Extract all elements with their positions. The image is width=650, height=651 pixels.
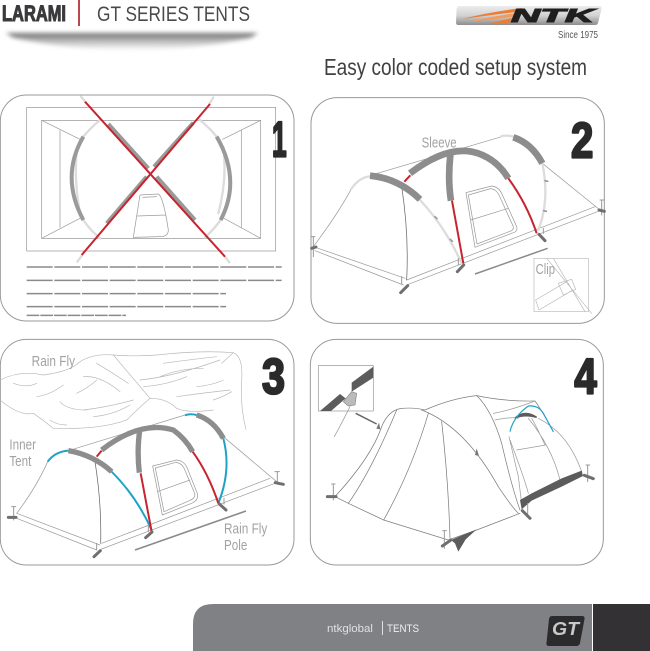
rain fly pole label: Pole xyxy=(224,537,247,554)
panel: step 2 xyxy=(311,98,604,323)
panel: step 3 xyxy=(0,339,294,565)
sleeve label: Sleeve xyxy=(422,135,457,152)
tent outline xyxy=(313,137,600,285)
stakes xyxy=(312,200,604,293)
ground sheet shading xyxy=(451,471,583,552)
pole rod xyxy=(475,248,548,274)
sleeves xyxy=(68,415,223,473)
pointer arrow xyxy=(356,413,377,424)
crossed red poles xyxy=(77,97,229,262)
pole rod xyxy=(135,511,246,550)
blue rain fly poles xyxy=(48,414,227,530)
header shadow xyxy=(6,33,258,50)
stakes xyxy=(327,465,593,548)
clip inset xyxy=(534,258,592,313)
footer divider xyxy=(382,621,383,635)
footer grey panel xyxy=(193,604,592,651)
stakes xyxy=(8,472,283,557)
clip inset: Clip xyxy=(536,261,555,278)
NTK logo xyxy=(456,6,602,41)
sleeves xyxy=(370,137,542,201)
panel frame xyxy=(0,95,294,321)
step number 4: 4 xyxy=(574,349,597,405)
GT logo xyxy=(546,616,585,646)
rain fly pole label: Rain Fly xyxy=(224,520,268,537)
small direction arrows xyxy=(376,423,479,456)
step number 3: 3 xyxy=(262,349,285,405)
sleeves xyxy=(72,123,230,223)
red poles xyxy=(97,451,218,532)
dashed pole lines xyxy=(27,267,282,315)
logo wordmark: NTK xyxy=(511,6,598,26)
inner tent label: Tent xyxy=(9,453,32,470)
fly outline xyxy=(335,396,582,540)
pale poles xyxy=(352,136,545,263)
footer section text: TENTS xyxy=(387,623,419,635)
logo bar xyxy=(456,6,602,25)
heading: Easy color coded setup system xyxy=(324,54,587,80)
panel frame xyxy=(310,339,603,565)
rain fly label: Rain Fly xyxy=(32,353,75,370)
guy rope inset xyxy=(318,366,373,437)
pale pole arcs xyxy=(76,120,225,238)
header title xyxy=(2,0,250,26)
panel frame xyxy=(311,98,604,323)
logo flame xyxy=(462,8,522,24)
rain fly xyxy=(0,352,246,429)
footer band xyxy=(193,604,650,651)
tent floor plan xyxy=(27,107,276,251)
door fly shading xyxy=(515,413,537,418)
pole joints xyxy=(435,181,548,241)
GT logo: GT xyxy=(552,619,581,639)
series name: GT SERIES TENTS xyxy=(97,3,250,26)
panel: step 4 xyxy=(310,339,603,565)
logo tagline: Since 1975 xyxy=(558,29,598,41)
footer dark block xyxy=(593,604,650,651)
model name: LARAMI xyxy=(2,1,66,26)
step number 2: 2 xyxy=(571,112,593,168)
step number 1: 1 xyxy=(272,112,287,168)
tent outline xyxy=(17,415,277,550)
blue door pole xyxy=(510,406,553,432)
inner tent label: Inner xyxy=(9,436,36,453)
footer brand text: ntkglobal xyxy=(327,623,373,635)
panel frame xyxy=(0,339,294,565)
title divider xyxy=(78,0,80,26)
panel: step 1 xyxy=(0,95,294,321)
red poles xyxy=(404,175,537,263)
